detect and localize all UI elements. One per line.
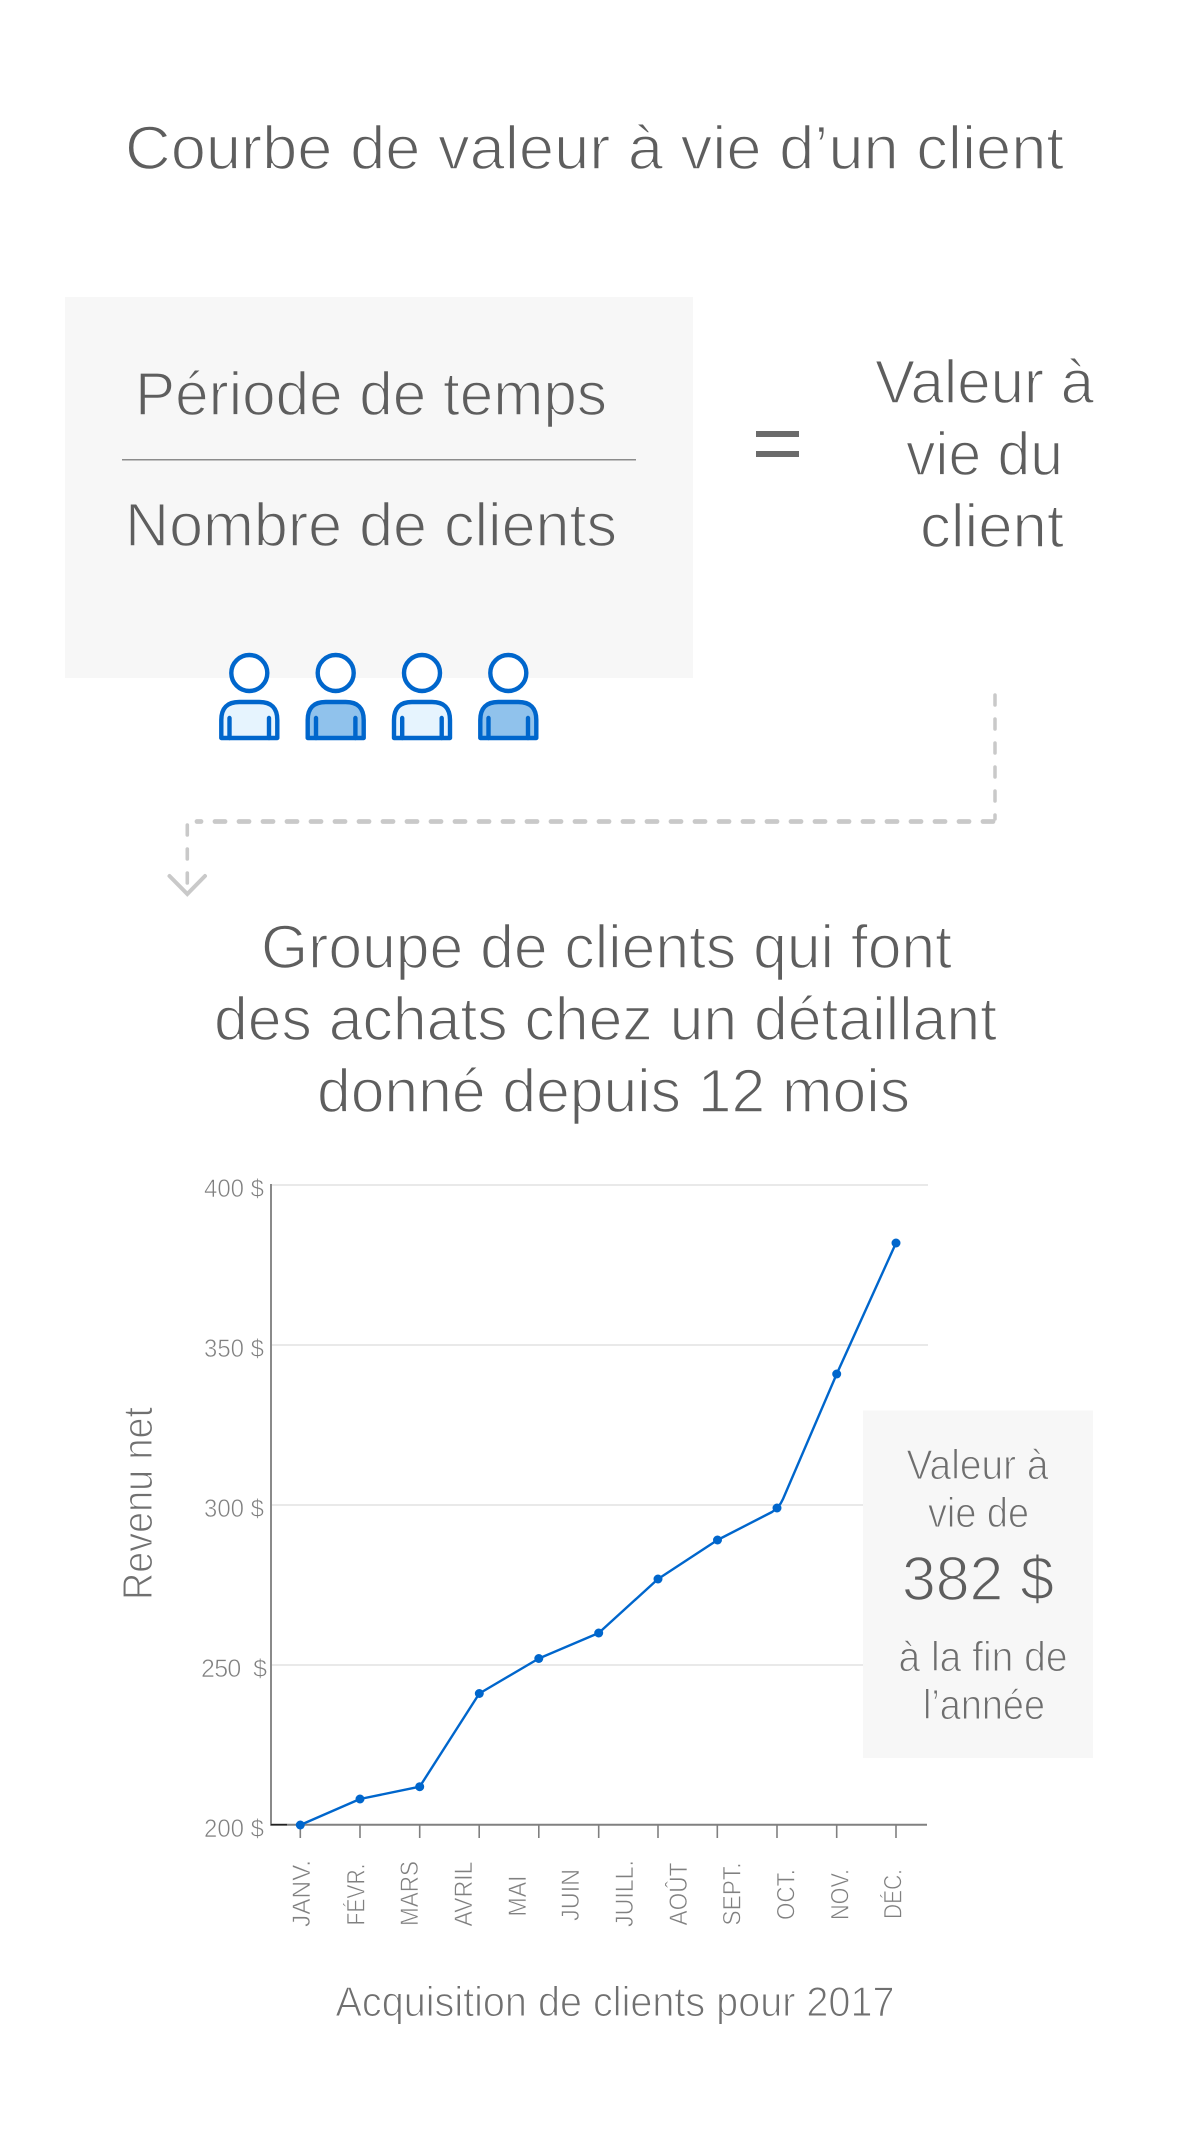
y axis title: Revenu net: [114, 1407, 161, 1600]
callout: lifetime value: à la fin de: [898, 1633, 1068, 1680]
data line: [300, 1243, 896, 1825]
x axis month labels: DÉC.: [879, 1869, 908, 1919]
x axis month labels: SEPT.: [719, 1862, 747, 1926]
y axis tick labels: 400 $: [204, 1175, 264, 1203]
x axis month labels: JANV.: [288, 1860, 316, 1927]
arrow: dashed connector to cohort heading: [170, 695, 995, 894]
text: result of formula: Valeur à: [875, 348, 1094, 416]
icon: customer 1: [221, 655, 277, 738]
x axis month labels: [288, 1860, 908, 1927]
y axis tick labels: 200 $: [204, 1815, 264, 1843]
x axis month labels: JUIN: [557, 1869, 585, 1921]
heading: cohort description: Groupe de clients qui font: [261, 913, 952, 981]
icon: customer 4: [480, 655, 536, 738]
icon: customer 3: [394, 655, 450, 738]
y axis tick labels: 300 $: [204, 1495, 264, 1523]
x axis month labels: NOV.: [826, 1869, 854, 1920]
x axis title: Acquisition de clients pour 2017: [336, 1978, 894, 2025]
x axis month labels: JUILL.: [611, 1860, 639, 1927]
callout: lifetime value: 382 $: [902, 1545, 1054, 1614]
text: result of formula: client: [920, 492, 1064, 560]
icon: customer 2: [308, 655, 364, 738]
data points: [296, 1238, 900, 1830]
heading: cohort description: des achats chez un détaillant: [214, 985, 997, 1053]
callout: lifetime value: [863, 1410, 1093, 1758]
x axis month labels: OCT.: [772, 1869, 800, 1920]
fraction line: [122, 459, 636, 460]
x axis month labels: MAI: [504, 1876, 532, 1916]
heading: cohort description: [214, 913, 997, 1125]
x axis month labels: AOÛT: [664, 1862, 693, 1926]
callout: lifetime value: Valeur à: [906, 1441, 1049, 1488]
x axis month labels: FÉVR.: [341, 1864, 370, 1926]
x axis month labels: MARS: [396, 1861, 424, 1926]
axes: [270, 1184, 927, 1838]
panel: formula fraction: [65, 297, 693, 678]
callout: lifetime value: l’année: [923, 1681, 1045, 1728]
y axis tick labels: 250 $: [201, 1655, 267, 1683]
x axis month labels: AVRIL: [450, 1861, 478, 1926]
line chart: net revenue by month: [114, 1175, 928, 2025]
equals sign: [756, 431, 799, 457]
y axis tick labels: [201, 1175, 267, 1843]
callout: lifetime value: vie de: [928, 1489, 1029, 1536]
text: result of formula: vie du: [906, 420, 1063, 488]
denominator text: Nombre de clients: [125, 491, 617, 559]
y axis tick labels: 350 $: [204, 1335, 264, 1363]
title: Courbe de valeur à vie d’un client: [125, 114, 1064, 182]
text: result of formula: [875, 348, 1094, 560]
heading: cohort description: donné depuis 12 mois: [317, 1057, 910, 1125]
horizontal grid: [271, 1185, 928, 1665]
numerator text: Période de temps: [135, 360, 607, 428]
icon: group of four customers: [221, 655, 536, 738]
